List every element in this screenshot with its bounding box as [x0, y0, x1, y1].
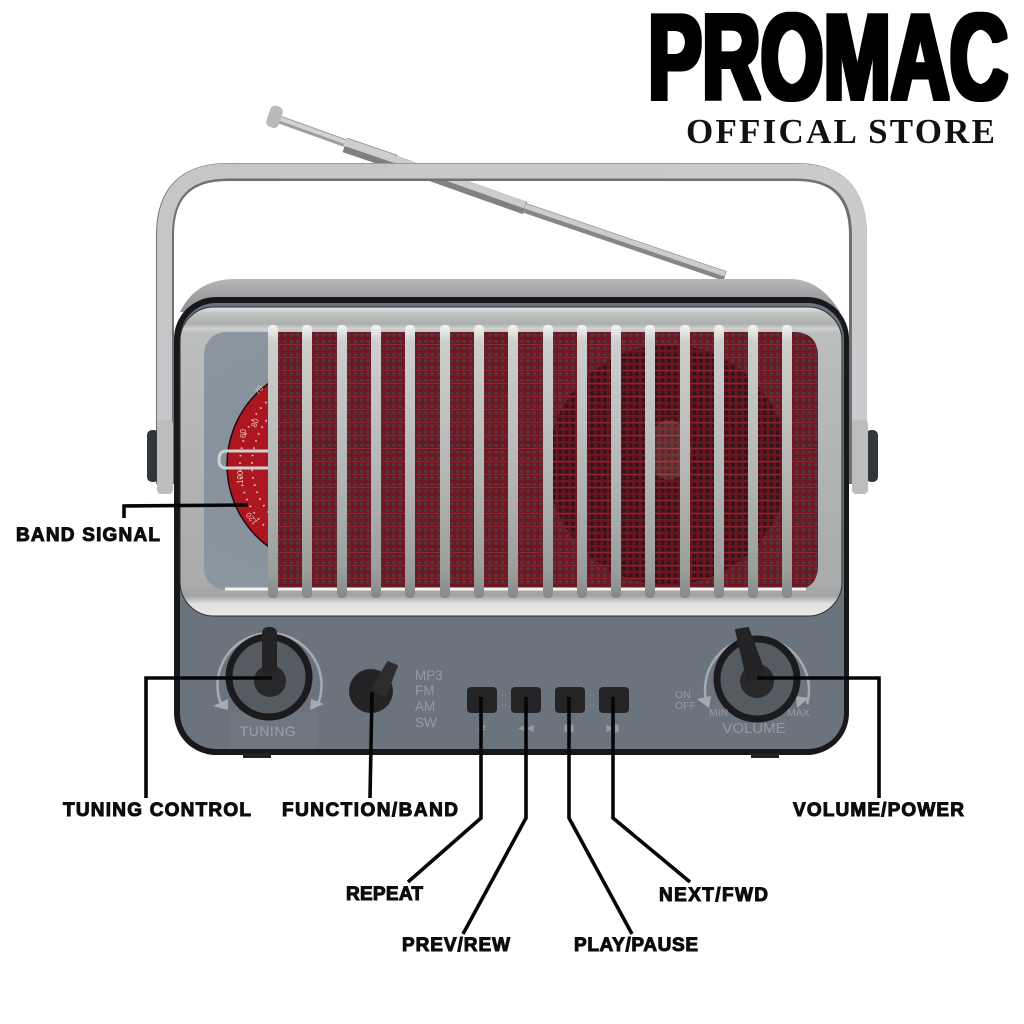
carrying handle — [147, 171, 878, 494]
handle pivot right — [866, 430, 878, 482]
volume labels: VOLUME — [722, 720, 786, 737]
volume labels: OFF — [675, 700, 696, 712]
antenna — [265, 104, 725, 276]
handle pivot left — [147, 430, 159, 482]
function switch — [349, 662, 443, 730]
band list — [415, 668, 443, 730]
label: repeat: REPEAT — [346, 884, 423, 905]
volume labels: ON — [675, 689, 691, 701]
label: next/fwd: NEXT/FWD — [659, 885, 768, 906]
tuning dial: 60 — [239, 429, 248, 438]
label: function/band: FUNCTION/BAND — [282, 800, 458, 821]
button symbols: ▶▮ — [606, 723, 620, 734]
button symbols: ▮▮ — [563, 723, 575, 734]
band list: AM — [415, 699, 435, 714]
tuning label: TUNING — [240, 723, 296, 739]
tuning dial: 80 — [249, 417, 261, 429]
label: tuning control: TUNING CONTROL — [63, 800, 251, 821]
callout lines — [124, 505, 879, 934]
button symbols — [478, 723, 620, 734]
label: band signal: BAND SIGNAL — [16, 525, 160, 546]
tuning knob — [213, 627, 324, 739]
speaker grille frame — [180, 307, 842, 616]
volume labels: MIN — [709, 707, 728, 719]
dial window — [204, 332, 818, 590]
band list: FM — [415, 683, 434, 698]
dial pointer clip — [219, 451, 268, 468]
grille slats — [268, 325, 792, 598]
feet — [243, 753, 271, 758]
tuning dial: 120 — [244, 510, 260, 526]
label: volume/power: VOLUME/POWER — [793, 800, 964, 821]
handle brackets — [157, 420, 173, 494]
tuning dial — [226, 382, 268, 548]
button symbols: ◀◀ — [518, 723, 534, 734]
volume labels — [675, 689, 810, 737]
band list: MP3 — [415, 668, 443, 683]
label: prev/rew: PREV/REW — [402, 935, 510, 956]
label: play/pause: PLAY/PAUSE — [574, 935, 698, 956]
radio body — [174, 279, 849, 758]
band list: SW — [415, 715, 437, 730]
volume labels: MAX — [787, 707, 810, 719]
tuning dial: 70 — [253, 383, 266, 396]
tuning dial: 100 — [236, 470, 245, 484]
red mesh — [268, 332, 818, 590]
button symbols: ⇄ — [478, 723, 486, 734]
volume knob — [675, 628, 810, 737]
panel highlight — [230, 712, 318, 749]
brand subtitle: official store: OFFICAL STORE — [686, 112, 995, 151]
transport buttons — [467, 687, 629, 713]
